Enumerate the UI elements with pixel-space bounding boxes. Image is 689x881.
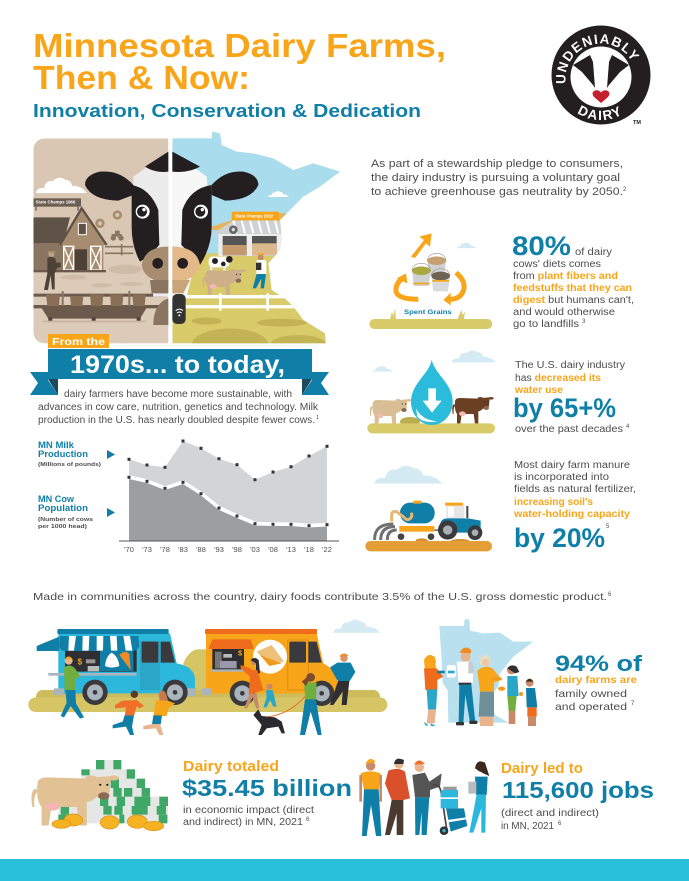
blue ice cream truck: $ [78,658,83,667]
stewardship pledge text: to achieve greenhouse gas neutrality by 2050. [371,186,623,198]
dog [253,709,285,735]
hand truck with boxes [433,785,467,835]
stat: family owned [555,651,643,713]
farmer with milk jug [447,648,477,725]
chart legend: (Millions of pounds) [38,462,101,468]
stat: water use: has decreased its [515,373,601,384]
area chart: milk production and cow population [119,440,339,554]
stat: 80% of diets: of dairy [575,247,612,258]
chart legend [38,440,115,530]
icon: cow with money [31,760,168,831]
title: Then & Now: [33,59,250,96]
intro paragraph: advances in cow care, nutrition, genetics and technology. Milk [38,402,318,413]
footer bar [0,859,689,881]
area chart: milk production and cow population: '13 [286,545,296,554]
stat: water use: The U.S. dairy industry [515,360,625,371]
stat: water use [513,360,630,435]
stat: water use: over the past decades [515,424,623,435]
stat: water use: by 65+% [513,393,616,423]
stat: family owned: family owned [555,688,627,700]
stat: 80% of diets: go to landfills [513,319,579,330]
intro paragraph [38,389,319,426]
area chart: milk production and cow population: '98 [232,545,242,554]
workers illustration [359,759,489,836]
hero illustration: cow then and now in Minnesota [33,130,342,362]
area chart: milk production and cow population: '03 [250,545,260,554]
communities text: Made in communities across the country, dairy foods contribute 3.5% of the U.S. gross domestic product. [33,591,607,603]
panel: 1970s farm [33,138,168,343]
stewardship pledge text: the dairy industry is pursuing a voluntary goal [371,172,620,184]
food trucks scene [28,620,387,735]
blue ice cream truck [37,629,196,705]
worker with hand truck [412,760,442,835]
orange grilled cheese truck [202,629,337,706]
stat: 80% of diets: from plant fibers and [513,271,618,282]
area chart: milk production and cow population: '70 [124,545,134,554]
boy with ice cream [519,679,537,726]
stat: manure fertilizer [513,460,636,553]
stat: economic impact [182,758,352,828]
stat: water use: 4 [626,424,630,430]
farmer 1970s [44,251,61,290]
farmer today [253,253,266,288]
area chart: milk production and cow population: '78 [160,545,170,554]
stat: 80% of diets: 80% [512,231,571,261]
stat: 80% of diets [512,231,634,330]
woman with bowl [423,655,445,726]
area chart: milk production and cow population: '18 [304,545,314,554]
subtitle: Innovation, Conservation & Dedication [33,100,421,121]
person: green sweater [61,657,84,719]
intro paragraph: dairy farmers have become more sustainable, with [64,389,292,400]
title: Minnesota Dairy Farms, [33,27,446,64]
orange grilled cheese truck: $ [238,649,242,658]
stat: 80% of diets: 3 [582,319,586,325]
from the label: From the [52,336,105,348]
tan cow [203,269,246,297]
feed trough and cows [33,294,167,297]
worker in orange shirt [359,759,382,836]
stat: jobs: 115,600 jobs [502,777,654,803]
stat: manure fertilizer: 5 [606,524,610,530]
stat: 80% of diets: feedstuffs that they can [513,283,632,294]
woman walking dog [300,673,322,735]
intro paragraph: production in the U.S. has nearly doubled despite fewer cows. [38,415,315,426]
logo: Undeniably Dairy: TM [633,120,641,126]
stat: economic impact: Dairy totaled [183,758,279,775]
stat: family owned: and operated [555,701,627,713]
grandmother [477,655,502,726]
area chart: milk production and cow population: '73 [142,545,152,554]
stat: jobs: 6 [558,821,562,827]
fence and hills [177,295,292,298]
small tractor [111,231,124,241]
stat: water use: water use [514,385,563,396]
stat: family owned: 94% of [555,651,643,676]
modern barn [214,221,283,235]
area chart: milk production and cow population: '08 [268,545,278,554]
stat: economic impact: in economic impact (direct [183,805,314,816]
ribbon banner: 1970s to today: 1970s... to today, [70,351,285,379]
intro paragraph: 1 [316,415,319,421]
person in blue shirt [330,653,355,705]
stat: 80% of diets: and would otherwise [513,307,615,318]
stat: economic impact: 6 [306,817,310,823]
stat: manure fertilizer: water-holding capacity [513,509,630,520]
stat: jobs: in MN, 2021 [501,821,554,832]
chart legend: MN Cow [38,494,75,504]
child in blue [263,684,277,707]
cow face [85,152,258,325]
chart legend: per 1000 head) [38,524,87,530]
stat: manure fertilizer: Most dairy farm manure [514,460,630,471]
communities text: 6 [608,592,612,598]
area chart: milk production and cow population: '93 [214,545,224,554]
stat: family owned: dairy farms are [555,674,637,686]
area chart: milk production and cow population: '83 [178,545,188,554]
stat: jobs: Dairy led to [501,761,583,777]
icon: water drop with cows [367,350,496,433]
holstein cow [209,256,233,271]
panel: 1970s farm: State Champs 1966 [36,200,76,205]
chart legend: Production [38,449,88,459]
stat: manure fertilizer: fields as natural fertilizer, [514,484,636,495]
title [33,27,446,96]
from the label [48,334,109,348]
stat: manure fertilizer: is incorporated into [514,472,609,483]
woman in orange dress [241,658,263,708]
icon: manure tractor [365,466,492,551]
stat: jobs [501,761,654,832]
logo: Undeniably Dairy: DAIRY [578,105,620,120]
stat: manure fertilizer: increasing soil's [514,497,593,508]
stat: 80% of diets: digest but humans can't, [513,295,634,306]
area chart: milk production and cow population: '22 [322,545,332,554]
logo: Undeniably Dairy [552,26,650,126]
girl with plate [498,665,519,724]
icon: spent grains recycling [369,233,492,329]
stat: economic impact: $35.45 billion [182,775,352,801]
panel: today's farm: State Champs 2022 [235,214,274,219]
panel: today's farm [172,130,342,362]
stat: manure fertilizer: by 20% [514,523,605,553]
chart legend: MN Milk [38,440,75,450]
stat: economic impact: and indirect) in MN, 2021 [183,817,303,828]
stewardship pledge text: As part of a stewardship pledge to consumers, [371,158,623,170]
icon: spent grains recycling: Spent Grains [404,309,452,316]
stat: jobs: (direct and indirect) [501,808,599,819]
ribbon banner: 1970s to today [30,349,329,395]
children running [113,691,144,735]
logo: Undeniably Dairy: UNDENIABLY [556,34,640,84]
family on Minnesota map [423,619,537,726]
stat: family owned: 7 [631,701,635,707]
stewardship pledge text [371,158,627,198]
chart legend: Population [38,503,88,513]
stewardship pledge text: 2 [623,187,627,193]
area chart: milk production and cow population: '88 [196,545,206,554]
chart legend: (Number of cows [38,517,93,523]
worker in plaid shirt [385,759,410,835]
woman with clipboard [468,761,489,833]
stat: 80% of diets: cows' diets comes [513,259,601,270]
